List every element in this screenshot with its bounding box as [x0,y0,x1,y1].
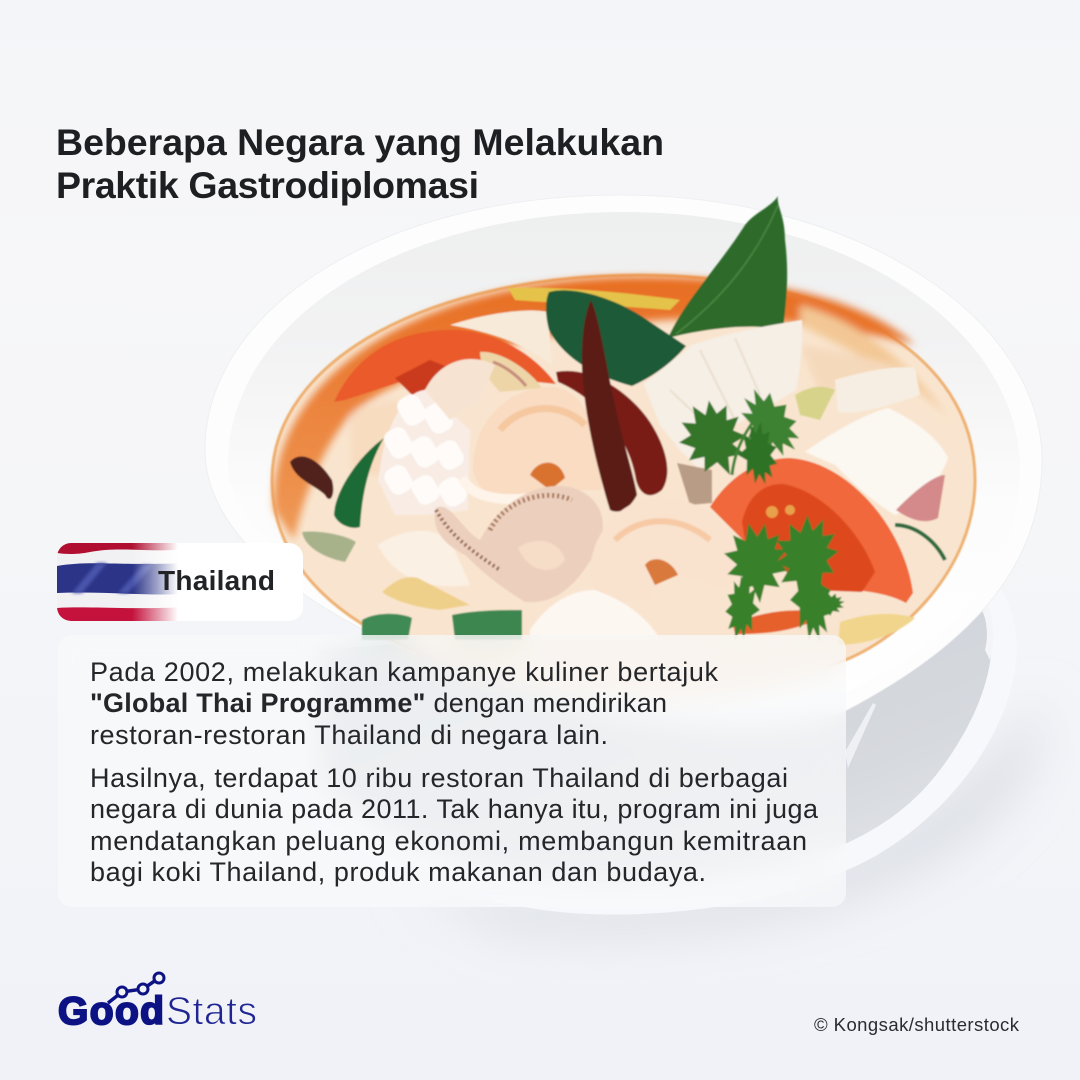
squid: upper cream [450,311,552,365]
stalk [677,463,712,505]
body text: mendatangkan peluang ekonomi, membangun kemitraan [90,826,807,856]
shrimp 2 [590,497,740,602]
icon: trend line [108,973,164,1003]
shadow under plate [400,700,1041,935]
squid bottom [530,590,660,640]
logo: GoodStats: Good [58,990,164,1033]
left soup details [290,456,333,499]
panel: description text card [58,635,846,907]
logo: GoodStats: Stats [166,990,257,1033]
cilantro upper left [667,390,760,489]
bowl rim [205,195,1042,727]
saucer [300,583,1017,915]
logo: GoodStats [58,973,257,1033]
country label: Thailand: Thailand [158,565,275,596]
chili front [582,300,637,512]
country label: Thailand [57,543,303,621]
body text: restoran-restoran Thailand di negara lain. [90,720,608,750]
overlay texts and labels [57,128,1019,1035]
green stripe right [895,525,945,560]
tomato left [334,330,556,402]
bamboo [382,577,470,610]
bowl inner wall [228,212,1020,701]
soup [272,196,975,692]
title [56,121,664,206]
body text: negara di dunia pada 2011. Tak hanya itu, program ini juga [90,794,819,824]
body text: Pada 2002, melakukan kampanye kuliner bertajuk [90,657,718,687]
shrimp 1 [473,387,602,504]
photo credit: © Kongsak/shutterstock [814,1014,1020,1035]
chili back [556,371,667,495]
body text [90,657,819,887]
title: Praktik Gastrodiplomasi [56,164,479,206]
squid left [378,390,470,515]
shallot [480,352,542,392]
bottom greens [362,614,412,640]
orange chunk bottom right [733,610,822,634]
squid top right [644,320,802,470]
squid right fan [805,408,948,515]
cilantro lower [722,511,845,644]
body text: "Global Thai Programme" dengan mendirikan [90,688,667,718]
yellow lemongrass [508,288,680,310]
body text: Hasilnya, terdapat 10 ribu restoran Thailand di berbagai [90,763,788,793]
green leaf top [668,196,787,338]
icon: Thai flag [57,543,187,621]
body text: bagi koki Thailand, produk makanan dan budaya. [90,857,706,887]
tomato right [710,458,913,603]
pink onion right [896,475,945,521]
tentacle squid [435,486,603,602]
dark leaf [546,290,686,386]
cilantro upper right [727,379,811,486]
title: Beberapa Negara yang Melakukan [56,121,664,163]
lemongrass right [795,387,835,420]
